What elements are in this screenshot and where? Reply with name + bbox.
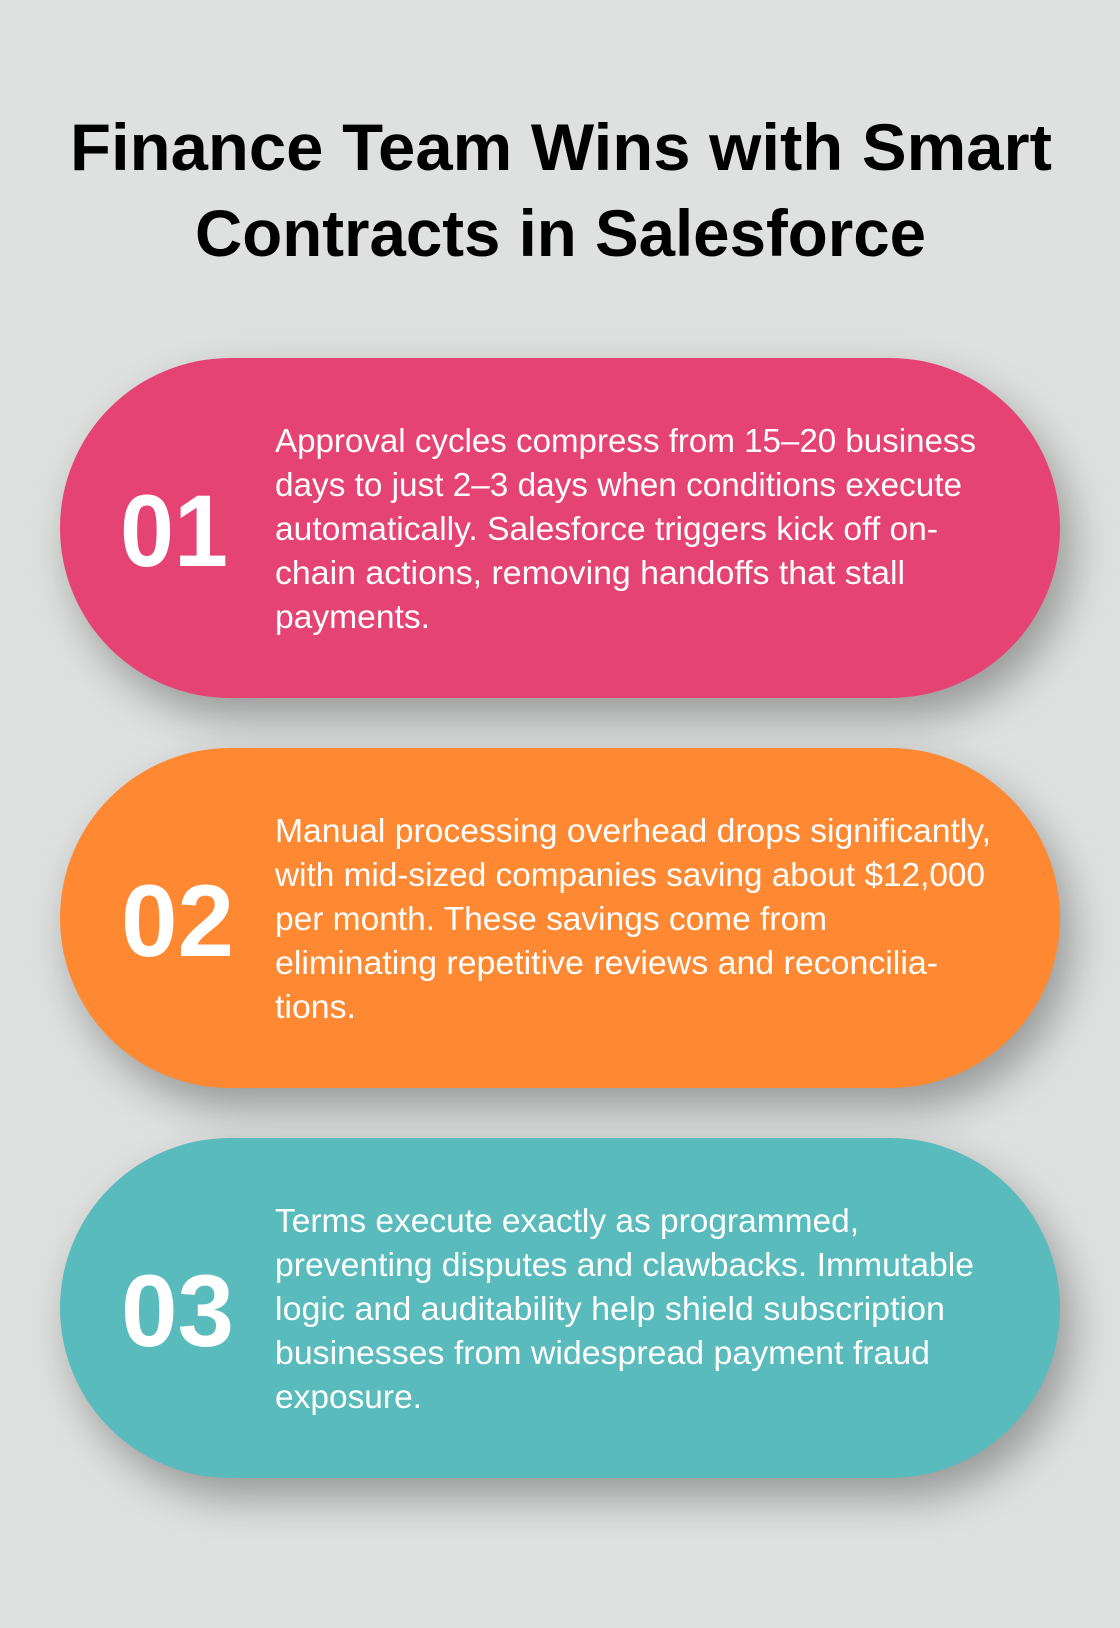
panel: step 01 approval cycles: 01 — [120, 474, 228, 588]
text block: terms execute: businesses from widespread payment fraud — [275, 1334, 930, 1371]
title: Contracts in Salesforce — [195, 196, 926, 270]
text block: terms execute: logic and auditability help shield subscription — [275, 1290, 945, 1327]
text block: approval cycles: Approval cycles compress from 15–20 business — [275, 422, 976, 459]
text block: approval cycles — [275, 422, 976, 635]
text block: processing overhead: with mid-sized companies saving about $12,000 — [274, 856, 985, 893]
panel: step 01 approval cycles — [60, 358, 1060, 698]
text block: terms execute: preventing disputes and clawbacks. Immutable — [275, 1246, 974, 1283]
text block: approval cycles: automatically. Salesforce triggers kick off on- — [275, 510, 938, 547]
text block: processing overhead — [274, 812, 991, 1025]
title: Finance Team Wins with Smart — [70, 110, 1052, 184]
title — [70, 110, 1052, 270]
text block: processing overhead: Manual processing overhead drops significantly, — [275, 812, 991, 849]
panel: step 02 processing overhead: 02 — [121, 864, 234, 978]
text block: terms execute: Terms execute exactly as programmed, — [275, 1202, 859, 1239]
text block: processing overhead: eliminating repetitive reviews and reconcilia- — [275, 944, 938, 981]
panel: step 02 processing overhead — [60, 748, 1060, 1088]
panel: step 03 terms execute: 03 — [121, 1254, 234, 1368]
text block: terms execute — [275, 1202, 974, 1415]
text block: processing overhead: per month. These savings come from — [275, 900, 827, 937]
text block: terms execute: exposure. — [275, 1378, 422, 1415]
text block: processing overhead: tions. — [275, 988, 356, 1025]
panel: step 03 terms execute — [60, 1138, 1060, 1478]
text block: approval cycles: chain actions, removing handoffs that stall — [275, 554, 905, 591]
text block: approval cycles: days to just 2–3 days when conditions execute — [275, 466, 962, 503]
text block: approval cycles: payments. — [275, 598, 430, 635]
